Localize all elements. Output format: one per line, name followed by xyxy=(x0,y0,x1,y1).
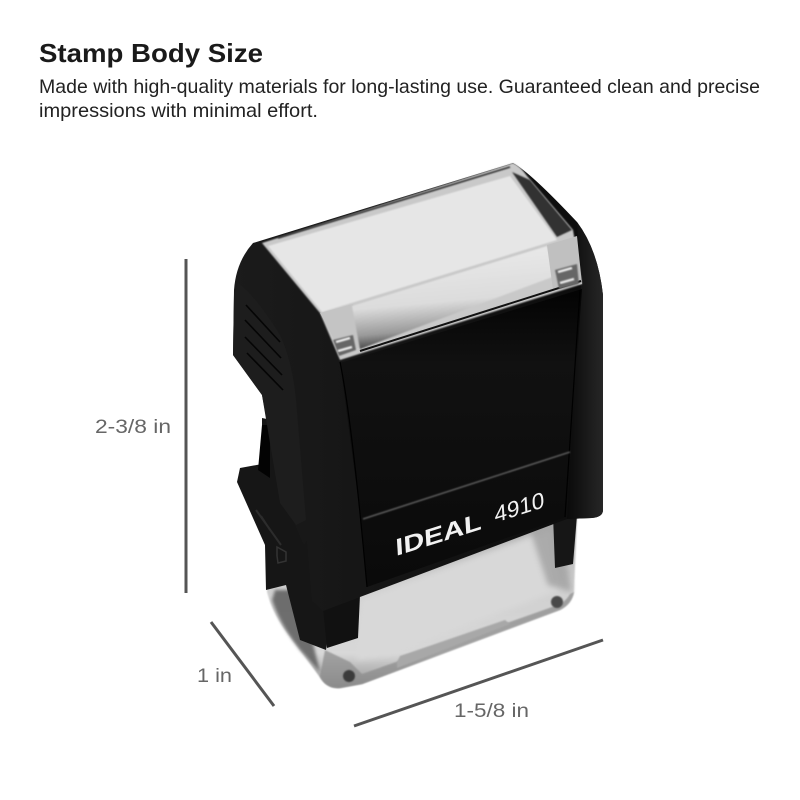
clear stamp base xyxy=(267,515,577,688)
width label: 1-5/8 in xyxy=(454,700,529,722)
description text: impressions with minimal effort. xyxy=(39,100,318,122)
brand text xyxy=(395,487,545,561)
brand text: 4910 xyxy=(494,487,545,528)
right side column xyxy=(567,222,603,519)
front seam lines xyxy=(340,290,580,587)
stamp illustration xyxy=(233,163,603,688)
front left leg xyxy=(323,595,360,648)
title: Stamp Body Size xyxy=(39,38,263,68)
right leg xyxy=(553,515,577,568)
side grip panel xyxy=(233,283,306,525)
depth label: 1 in xyxy=(197,665,232,687)
right hinge xyxy=(555,264,579,289)
left hinge xyxy=(333,335,356,356)
width dimension line xyxy=(354,640,603,726)
description text: Made with high-quality materials for long-lasting use. Guaranteed clean and precise xyxy=(39,76,760,98)
front panel xyxy=(340,289,582,587)
brand text: IDEAL xyxy=(395,508,482,561)
body shell xyxy=(233,163,603,611)
depth dimension line xyxy=(211,622,274,706)
height label: 2-3/8 in xyxy=(95,416,171,438)
clear lid xyxy=(262,163,582,360)
left side mechanism xyxy=(237,418,340,650)
height dimension line xyxy=(184,259,188,593)
description text xyxy=(39,76,760,122)
